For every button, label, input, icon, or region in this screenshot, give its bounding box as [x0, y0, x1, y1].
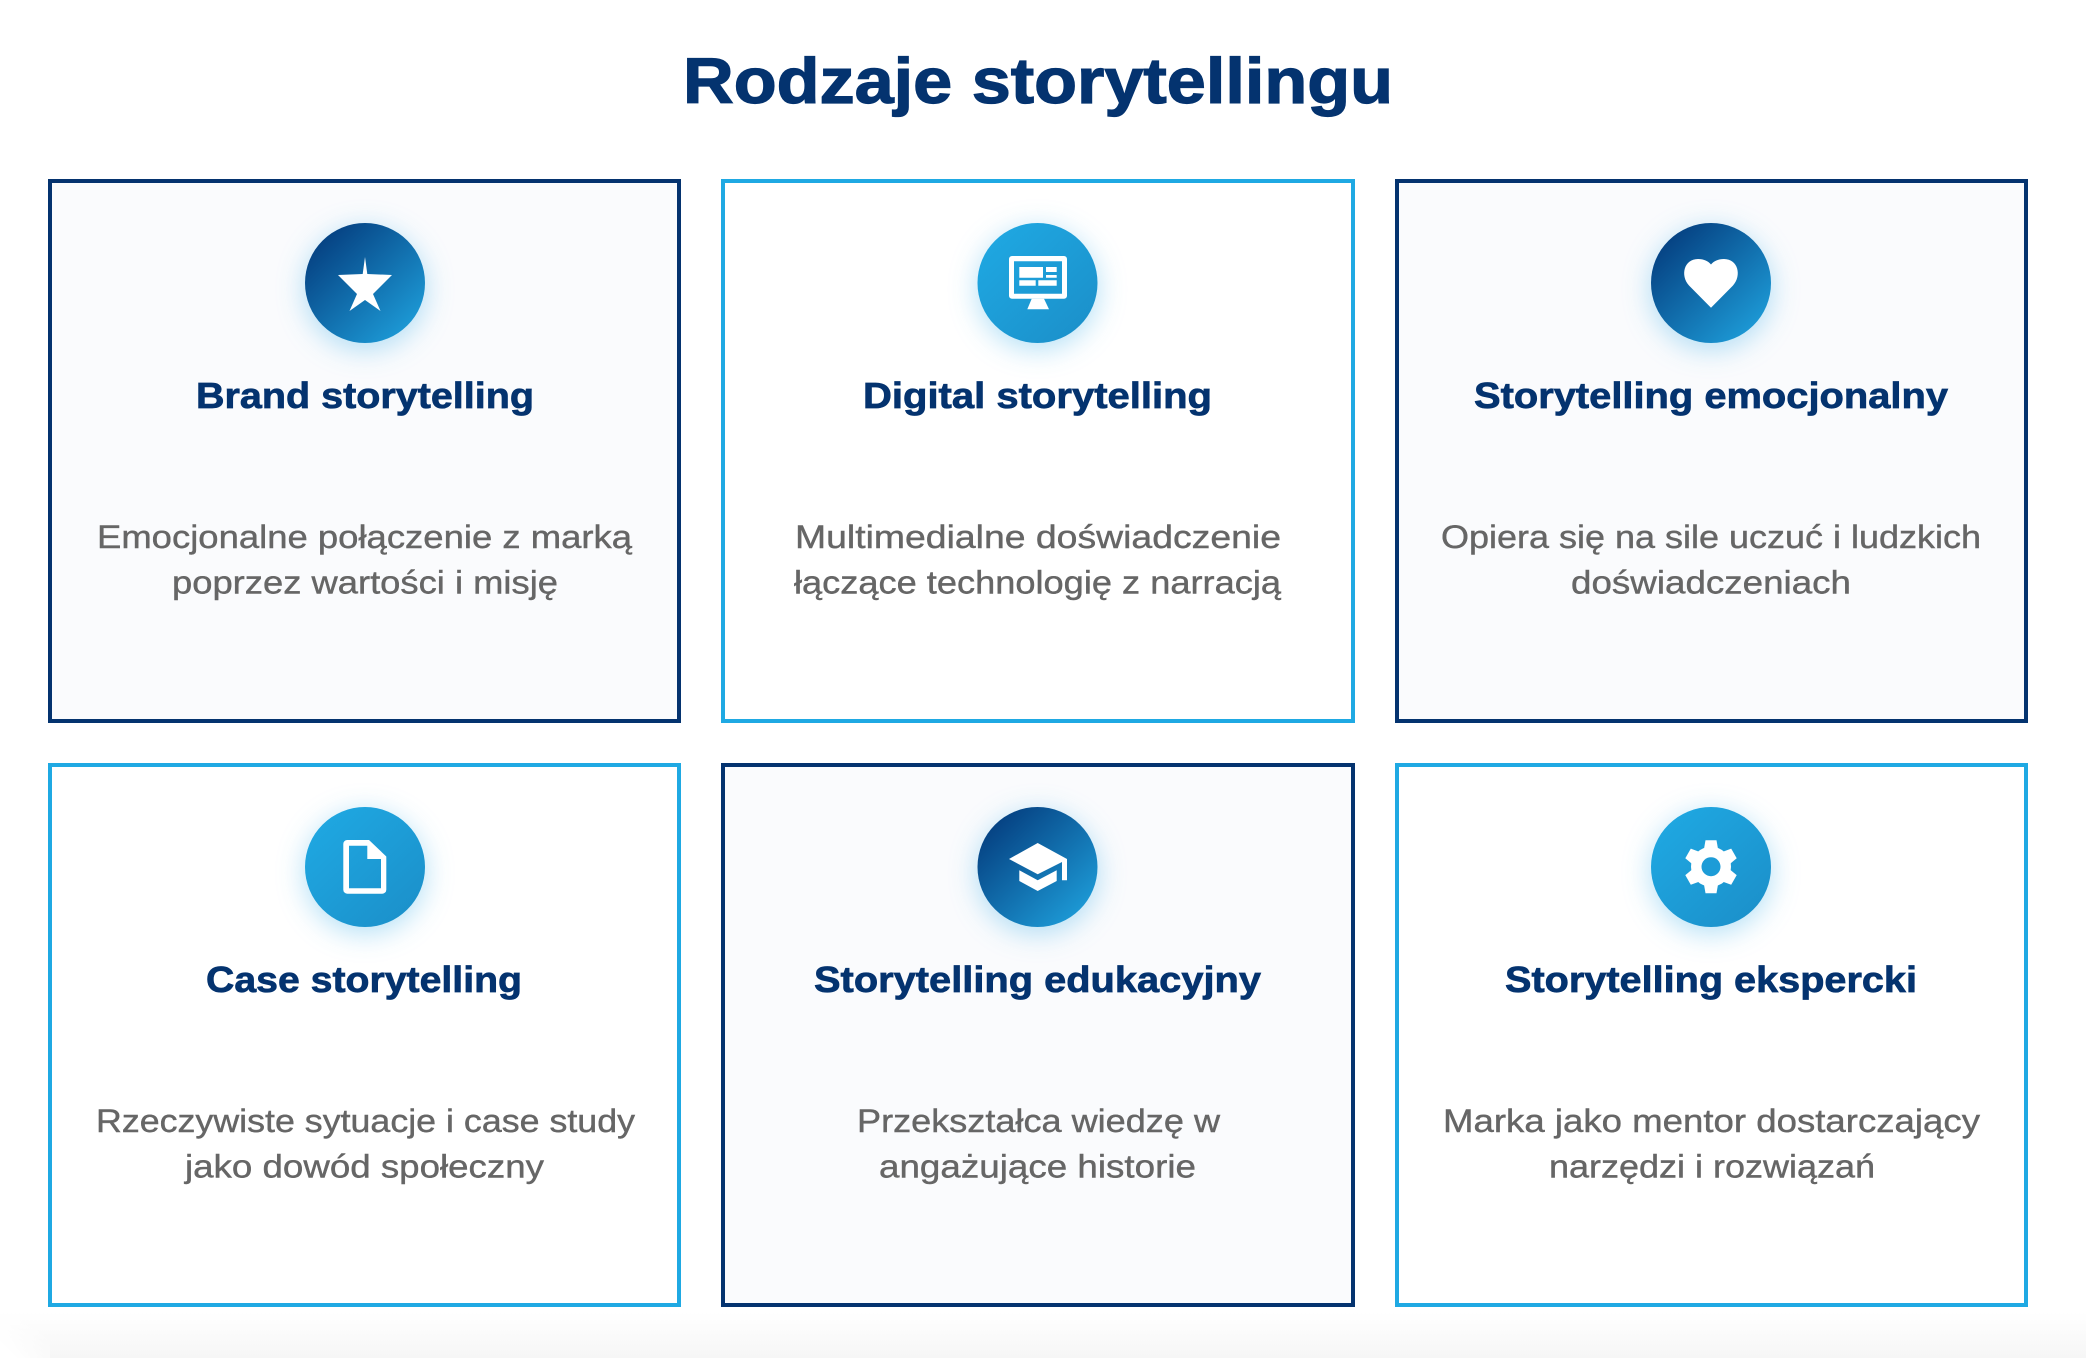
heading: Storytelling ekspercki	[1505, 959, 1917, 1000]
description	[1443, 1103, 1980, 1184]
icon: monitor	[978, 223, 1098, 343]
description: Rzeczywiste sytuacje i case study	[96, 1103, 635, 1139]
panel: Digital storytelling	[723, 181, 1353, 721]
description: Multimedialne doświadczenie	[795, 519, 1281, 555]
icon: star	[305, 223, 425, 343]
icon: gear	[1651, 807, 1771, 927]
description	[857, 1103, 1221, 1184]
description	[97, 519, 632, 600]
description: Emocjonalne połączenie z marką	[97, 519, 632, 555]
description: łączące technologię z narracją	[794, 564, 1281, 600]
panel: Storytelling edukacyjny	[723, 765, 1353, 1305]
heading: Storytelling edukacyjny	[814, 959, 1261, 1000]
description	[1441, 519, 1981, 600]
panel: Brand storytelling	[50, 181, 679, 721]
heading: Digital storytelling	[863, 375, 1212, 416]
icon: heart	[1651, 223, 1771, 343]
description: narzędzi i rozwiązań	[1549, 1148, 1875, 1184]
panel: Storytelling ekspercki	[1397, 765, 2026, 1305]
icon: document	[305, 807, 425, 927]
description: Marka jako mentor dostarczający	[1443, 1103, 1980, 1139]
description: poprzez wartości i misję	[172, 564, 558, 600]
heading: Storytelling emocjonalny	[1474, 375, 1948, 416]
description	[794, 519, 1281, 600]
bottom edge shadow band	[0, 1312, 2086, 1358]
panel: Storytelling emocjonalny	[1397, 181, 2026, 721]
title: Rodzaje storytellingu	[683, 45, 1393, 117]
description: jako dowód społeczny	[184, 1148, 544, 1184]
heading: Brand storytelling	[196, 375, 534, 416]
description: angażujące historie	[879, 1148, 1196, 1184]
heading: Case storytelling	[206, 959, 522, 1000]
panel: Case storytelling	[50, 765, 679, 1305]
description: Opiera się na sile uczuć i ludzkich	[1441, 519, 1981, 555]
description: Przekształca wiedzę w	[857, 1103, 1221, 1139]
icon: graduation cap	[978, 807, 1098, 927]
description: doświadczeniach	[1571, 564, 1851, 600]
description	[96, 1103, 635, 1184]
